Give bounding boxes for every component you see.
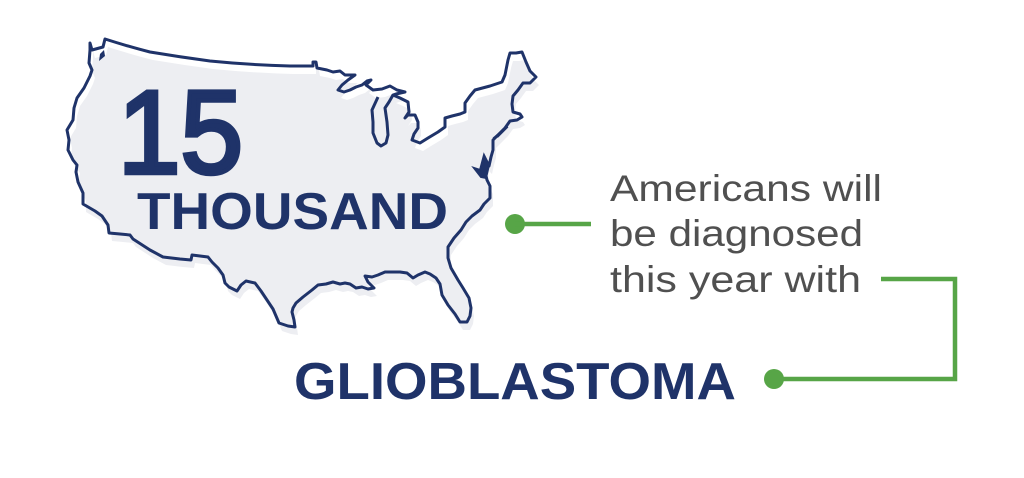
text block: Americans will be diagnosed this year with: Americans will [610,168,882,209]
map of the United States [67,39,539,335]
text block: Americans will be diagnosed this year with: be diagnosed [610,213,863,254]
connector: text to glioblastoma [764,279,955,389]
map offset gray fill [70,47,539,335]
text block: Americans will be diagnosed this year with [610,168,882,300]
connector: map to text [505,214,591,234]
Long Island detail [493,127,508,138]
heading: GLIOBLASTOMA: GLIOBLASTOMA [294,353,736,411]
label: THOUSAND: THOUSAND [137,183,448,241]
Chesapeake Bay detail [474,155,489,178]
number: 15: 15 [118,67,243,199]
text block: Americans will be diagnosed this year with: this year with [610,259,861,300]
Puget Sound detail [99,50,105,61]
Lake Michigan outline [372,95,393,146]
map outline [67,39,536,327]
